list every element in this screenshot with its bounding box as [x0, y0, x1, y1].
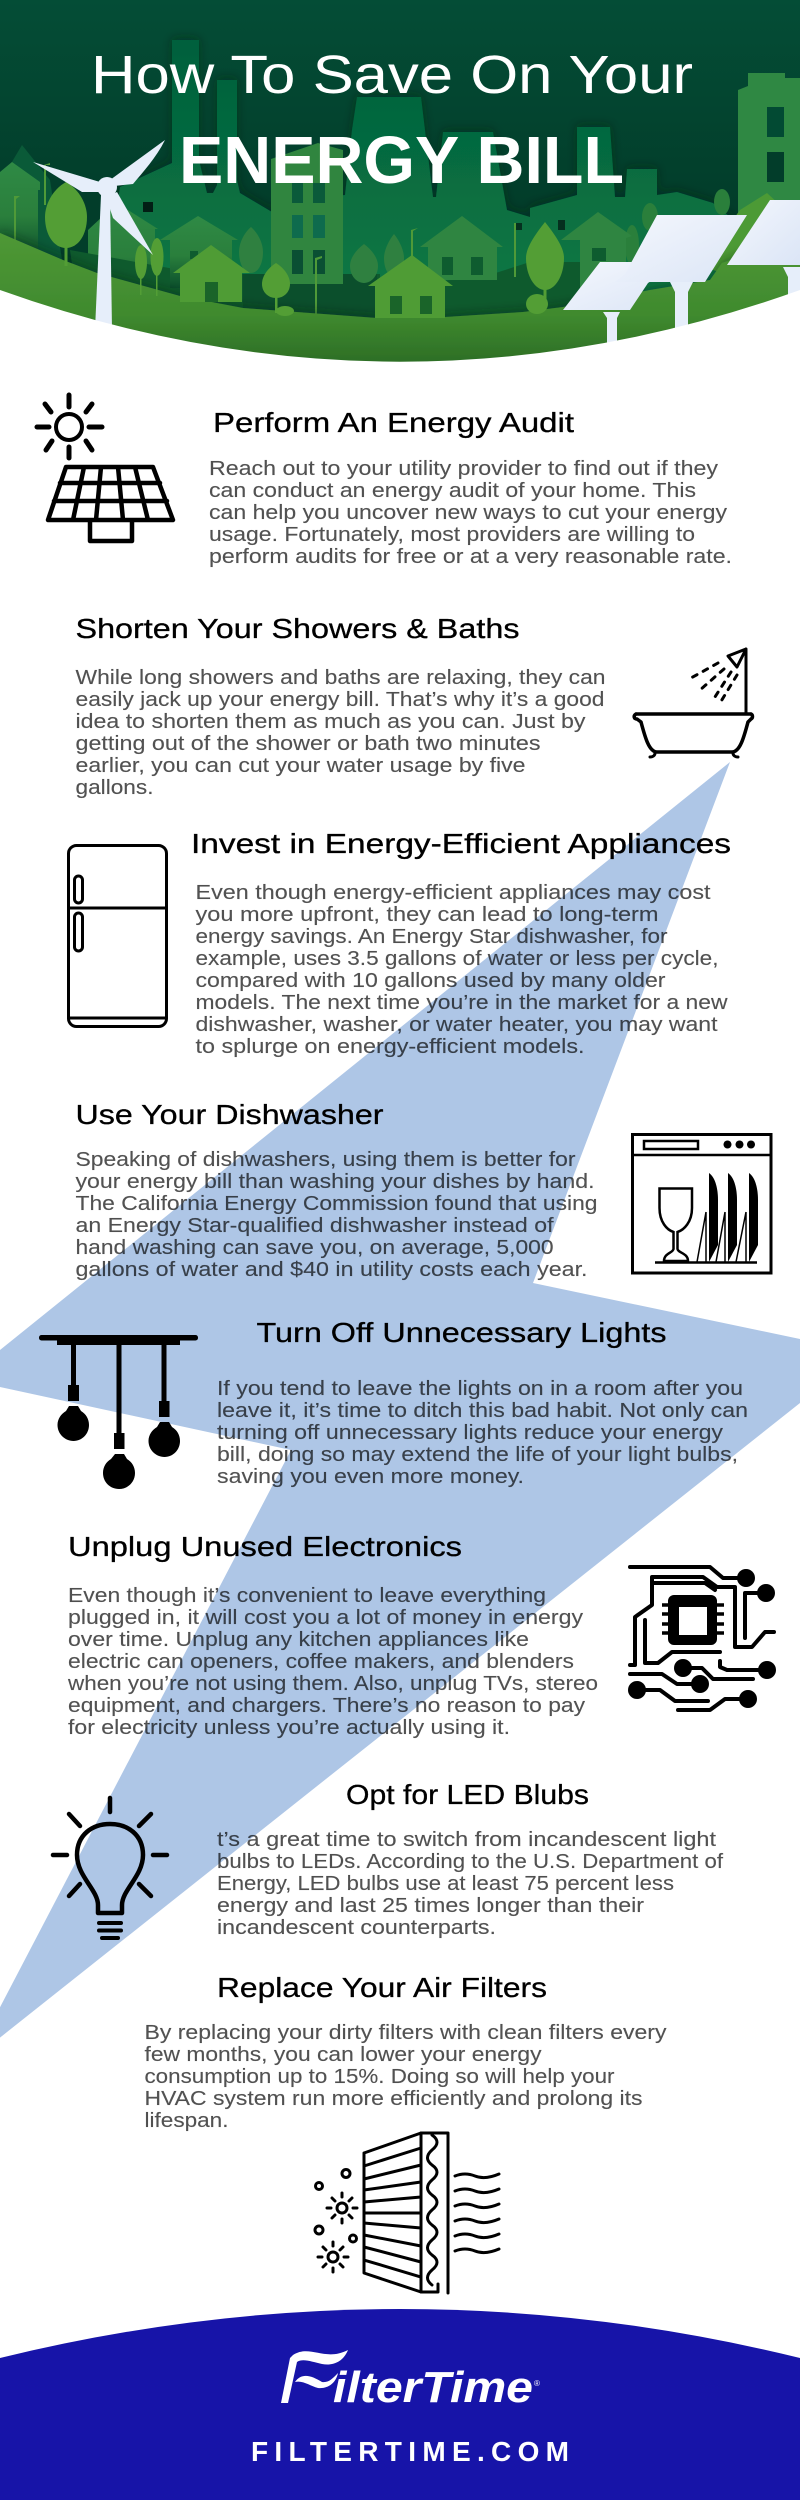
body text: getting out of the shower or bath two minutes	[76, 732, 540, 755]
body text: equipment, and chargers. There’s no reason to pay	[68, 1694, 586, 1717]
body text: usage. Fortunately, most providers are willing to	[209, 523, 695, 546]
body text: t’s a great time to switch from incandescent light	[217, 1828, 716, 1851]
body text: an Energy Star-qualified dishwasher instead of	[76, 1214, 554, 1237]
background lightning bolt	[0, 762, 800, 2059]
section: invest in energy-efficient appliances	[68, 828, 731, 1058]
website address: FILTERTIME.COM	[251, 2436, 569, 2467]
front ground	[0, 233, 800, 370]
logo	[281, 2350, 540, 2412]
body text: perform audits for free or at a very reasonable rate.	[209, 545, 732, 568]
body text	[209, 457, 732, 568]
back trees	[625, 189, 730, 265]
heading: Shorten Your Showers & Baths	[76, 613, 520, 644]
right green strip	[712, 193, 774, 271]
mid houses	[160, 212, 626, 288]
icon: refrigerator	[68, 846, 166, 1026]
body text: lifespan.	[144, 2109, 228, 2132]
body text	[196, 881, 728, 1058]
body text: you more upfront, they can lead to long-term	[196, 903, 658, 926]
logo: F	[281, 2363, 309, 2412]
heading: Use Your Dishwasher	[76, 1099, 384, 1130]
section: use your dishwasher	[76, 1099, 771, 1281]
house behind turbine	[88, 210, 158, 265]
section: opt for led bulbs	[53, 1779, 723, 1939]
body text: to splurge on energy-efficient models.	[196, 1035, 584, 1058]
left house	[0, 162, 40, 246]
back left house	[12, 145, 62, 260]
body text: gallons of water and $40 in utility costs each year.	[76, 1258, 588, 1281]
body text: consumption up to 15%. Doing so will help your	[144, 2065, 615, 2088]
body text: Reach out to your utility provider to find out if they	[209, 457, 719, 480]
heading: Replace Your Air Filters	[217, 1972, 547, 2003]
body text: energy savings. An Energy Star dishwasher, for	[196, 925, 668, 948]
body text: plugged in, it will cost you a lot of money in energy	[68, 1606, 584, 1629]
body text	[217, 1377, 748, 1488]
body text: incandescent counterparts.	[217, 1916, 496, 1939]
front houses	[173, 245, 453, 318]
icon: dishwasher	[632, 1134, 771, 1273]
body text: easily jack up your energy bill. That’s why it’s a good	[76, 688, 604, 711]
section: unplug unused electronics	[67, 1531, 776, 1739]
body text: bill, doing so may extend the life of your light bulbs,	[217, 1443, 738, 1466]
body text: your energy bill than washing your dishes by hand.	[76, 1170, 594, 1193]
body text: Even though it’s convenient to leave everything	[68, 1584, 546, 1607]
wind turbine	[33, 140, 165, 330]
front house windows	[205, 282, 432, 314]
logo: ®	[534, 2379, 540, 2388]
body text: when you’re not using them. Also, unplug TVs, stereo	[67, 1672, 598, 1695]
icon: hanging lights	[39, 1335, 198, 1489]
body text: can conduct an energy audit of your home. This	[209, 479, 696, 502]
heading: Unplug Unused Electronics	[68, 1531, 462, 1562]
back mid trees	[239, 227, 404, 283]
dark band	[70, 250, 600, 320]
right tall building	[738, 73, 800, 212]
central apartment building	[271, 143, 343, 285]
body text: If you tend to leave the lights on in a room after you	[217, 1377, 743, 1400]
header panel	[0, 0, 800, 372]
body text: can help you uncover new ways to cut your energy	[209, 501, 728, 524]
body text: Energy, LED bulbs use at least 75 percent less	[217, 1872, 674, 1895]
body text: over time. Unplug any kitchen appliances like	[68, 1628, 529, 1651]
icon: air filter	[315, 2133, 499, 2293]
mid house windows	[190, 248, 606, 275]
body text: energy and last 25 times longer than their	[217, 1894, 644, 1917]
body text: By replacing your dirty filters with clean filters every	[144, 2021, 667, 2044]
body text: bulbs to LEDs. According to the U.S. Department of	[217, 1850, 723, 1873]
body text: dishwasher, washer, or water heater, you may want	[196, 1013, 718, 1036]
section: replace your air filters	[144, 1972, 667, 2293]
body text: While long showers and baths are relaxing, they can	[76, 666, 606, 689]
body text: turning off unnecessary lights reduce your energy	[217, 1421, 724, 1444]
body text	[217, 1828, 723, 1939]
body text: saving you even more money.	[217, 1465, 524, 1488]
body text: HVAC system run more efficiently and prolong its	[144, 2087, 642, 2110]
mid-ground shade under building	[243, 274, 377, 320]
section: perform an energy audit	[37, 395, 732, 568]
right factory windows	[143, 202, 565, 230]
body text: for electricity unless you’re actually using it.	[68, 1716, 510, 1739]
body text	[67, 1584, 598, 1739]
factories and chimneys layer	[118, 36, 731, 292]
body text	[76, 1148, 598, 1281]
body text: Even though energy-efficient appliances may cost	[196, 881, 711, 904]
footer panel	[0, 2309, 800, 2500]
body text: leave it, it’s time to ditch this bad habit. Not only can	[217, 1399, 748, 1422]
title: How To Save On Your	[91, 45, 693, 105]
body text: The California Energy Commission found that using	[76, 1192, 598, 1215]
trees	[45, 182, 564, 316]
icon: light bulb	[53, 1798, 167, 1938]
title	[96, 55, 692, 184]
body text: idea to shorten them as much as you can. Just by	[76, 710, 586, 733]
section: shorten your showers and baths	[76, 613, 752, 799]
body text: compared with 10 gallons used by many older	[196, 969, 666, 992]
heading: Invest in Energy-Efficient Appliances	[191, 828, 731, 859]
street lamps	[14, 163, 516, 316]
body text: Speaking of dishwashers, using them is better for	[76, 1148, 576, 1171]
icon: bathtub and shower	[634, 649, 752, 757]
heading: Opt for LED Blubs	[346, 1779, 589, 1810]
body text: few months, you can lower your energy	[144, 2043, 542, 2066]
body text	[76, 666, 606, 799]
body text: models. The next time you’re in the market for a new	[196, 991, 728, 1014]
body text: example, uses 3.5 gallons of water or less per cycle,	[196, 947, 718, 970]
white curved bottom	[0, 290, 800, 372]
body text: electric can openers, coffee makers, and blenders	[68, 1650, 574, 1673]
icon: circuit board	[628, 1567, 776, 1710]
heading: Perform An Energy Audit	[213, 407, 574, 438]
title: ENERGY BILL	[179, 123, 624, 198]
heading: Turn Off Unnecessary Lights	[256, 1317, 666, 1348]
logo: ilterTime	[333, 2363, 533, 2412]
solar panels	[563, 200, 800, 345]
section: turn off unnecessary lights	[39, 1317, 748, 1489]
body text: gallons.	[76, 776, 154, 799]
body text	[144, 2021, 667, 2132]
icon: sun and solar panel	[37, 395, 173, 541]
body text: hand washing can save you, on average, 5,000	[76, 1236, 554, 1259]
body text: earlier, you can cut your water usage by five	[76, 754, 526, 777]
